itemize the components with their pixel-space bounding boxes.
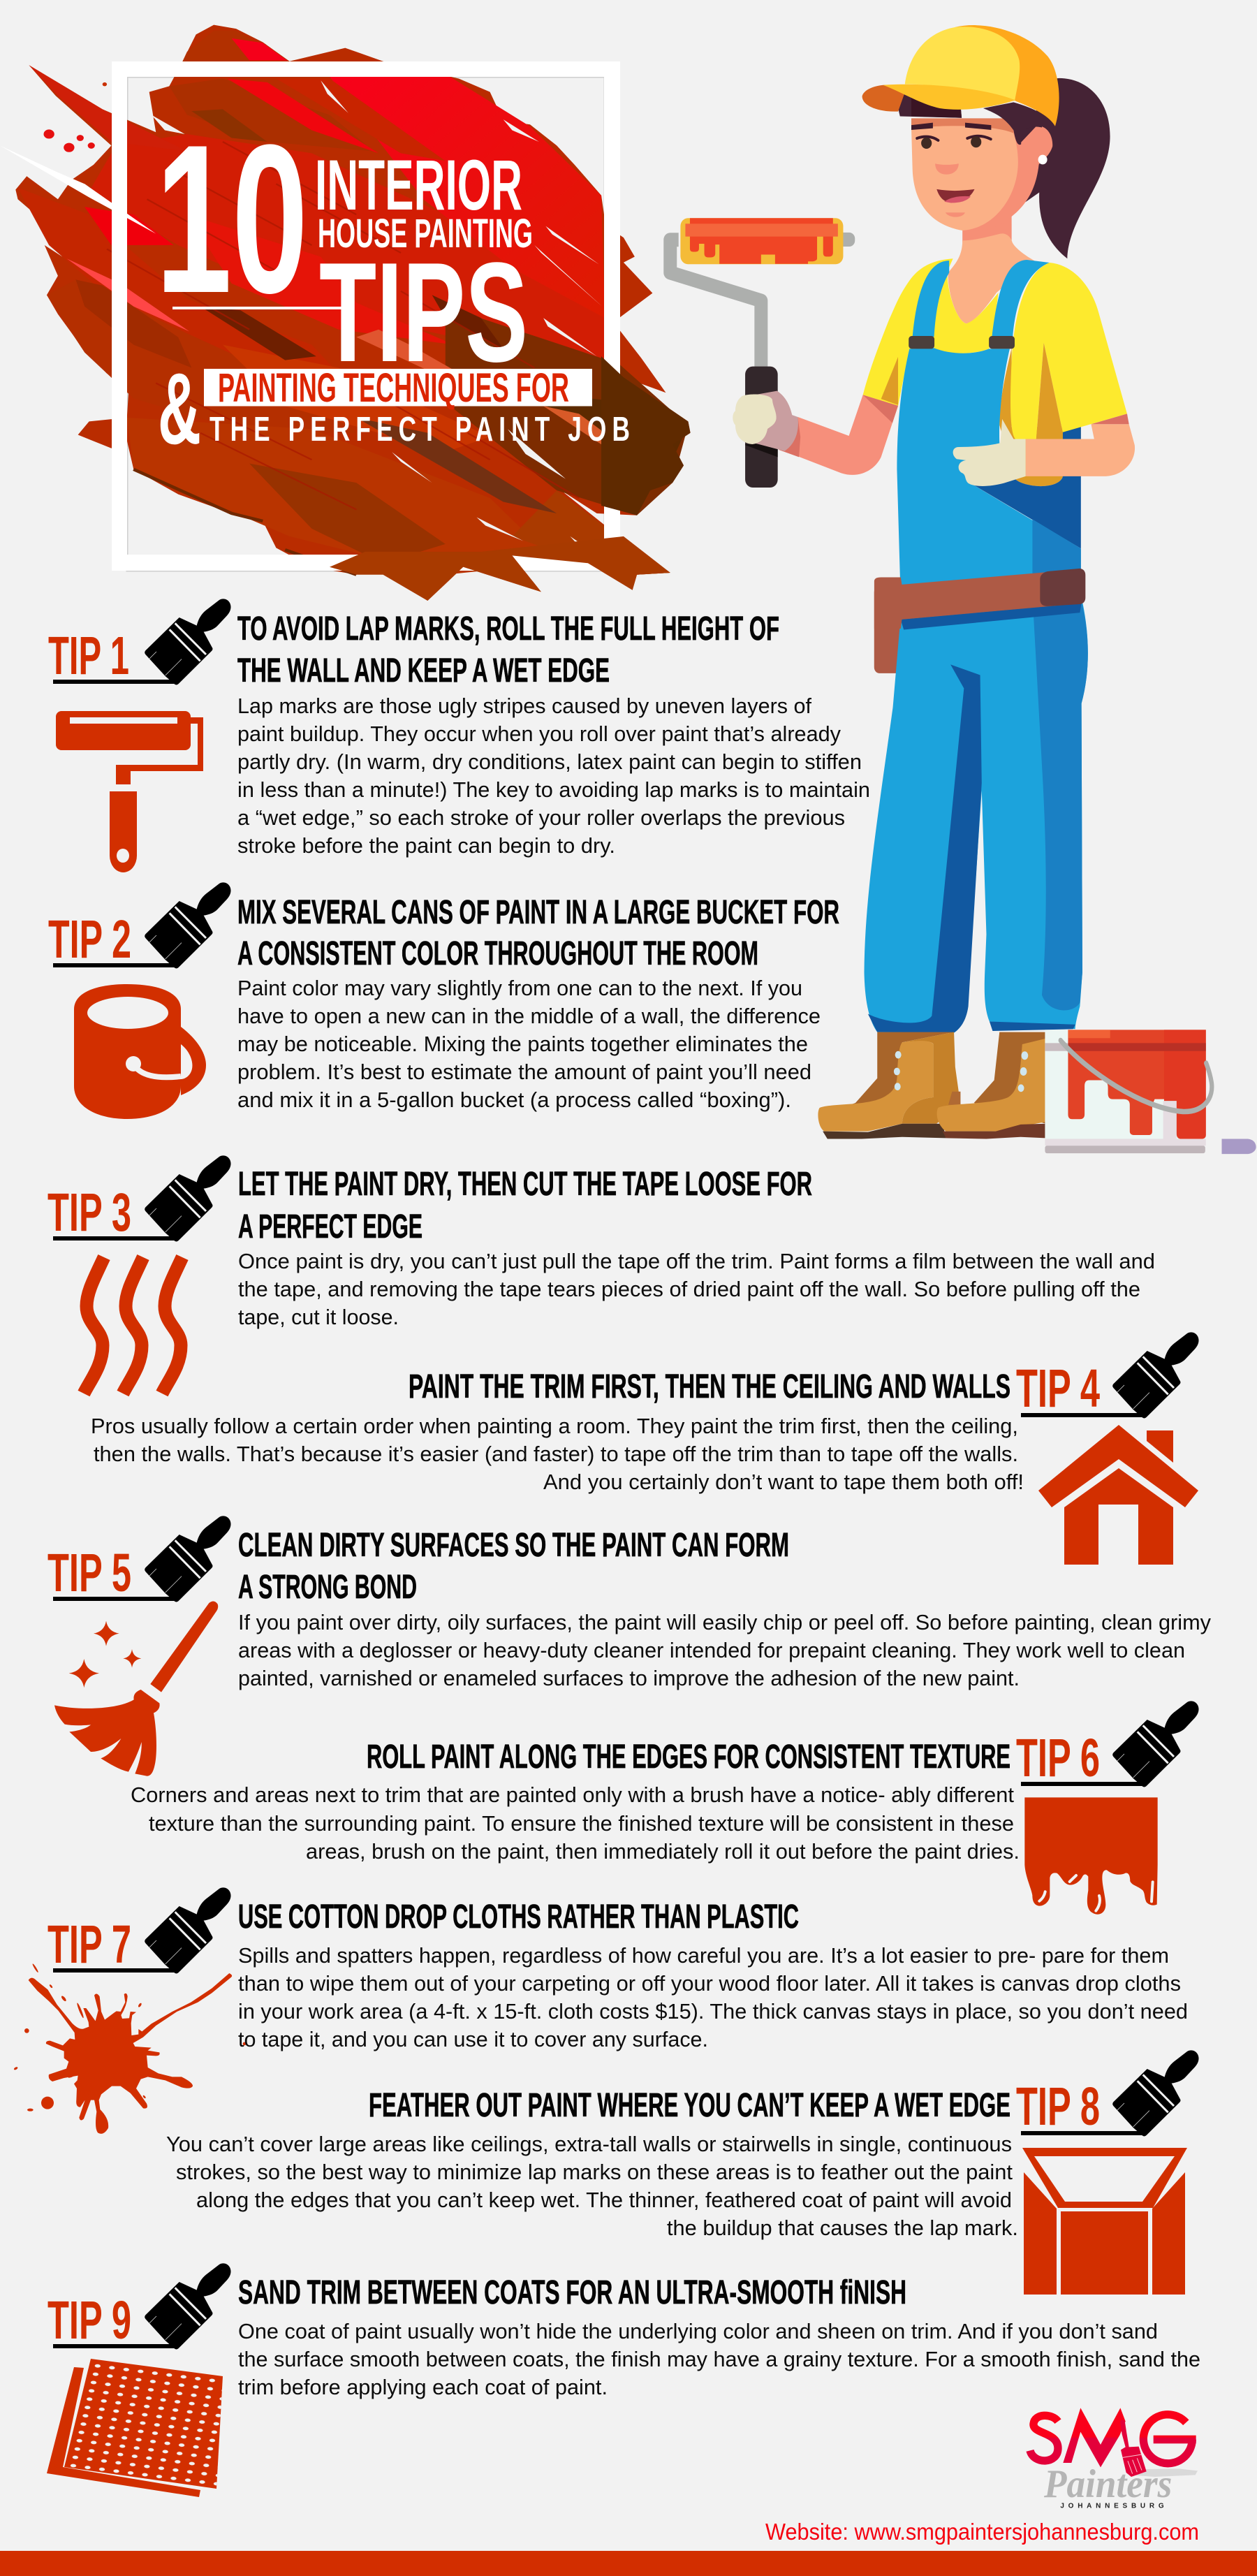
- paint overlapping the frame: [330, 356, 691, 601]
- tip 2 body text: and mix it in a 5-gallon bucket (a process called “boxing”).: [237, 1088, 791, 1112]
- tip 6 label: TIP 6: [1016, 1728, 1100, 1788]
- tip 5 label: [47, 1516, 231, 1603]
- tip 8 body text: along the edges that you can’t keep wet. The thinner, feathered coat of paint will avoid: [196, 2188, 1012, 2212]
- tip 7: [13, 1887, 1188, 2134]
- tip 4 body text: Pros usually follow a certain order when painting a room. They paint the trim first, then the ceiling,: [91, 1414, 1018, 1438]
- tip 1 body text: [237, 694, 870, 858]
- white frame: [112, 61, 620, 571]
- icon: sandpaper sheet: [47, 2359, 223, 2497]
- tip 7 body text: to tape it, and you can use it to cover any surface.: [238, 2027, 708, 2051]
- tip 6 body text: [131, 1783, 1020, 1864]
- tip 8 body text: the buildup that causes the lap mark.: [667, 2216, 1018, 2240]
- tip 7 body text: [238, 1943, 1188, 2051]
- tip 7 heading: USE COTTON DROP CLOTHS RATHER THAN PLASTIC: [238, 1898, 799, 1935]
- icon: paint roller: [56, 711, 203, 872]
- tip 7 label: TIP 7: [47, 1915, 131, 1975]
- icon: house: [1038, 1425, 1198, 1565]
- icon: paint bucket: [74, 984, 206, 1119]
- icon: broom with sparkles: [54, 1602, 218, 1776]
- worker: legs and boots: [818, 586, 1088, 1139]
- tip 8: [166, 2050, 1199, 2295]
- tip 1 body text: a “wet edge,” so each stroke of your roller overlaps the previous: [237, 805, 845, 830]
- tip 4 body text: And you certainly don’t want to tape them both off!: [543, 1470, 1024, 1494]
- logo: SMG Painters Johannesburg: Painters: [1043, 2463, 1172, 2506]
- tip 1 body text: Lap marks are those ugly stripes caused by uneven layers of: [237, 694, 811, 718]
- worker figure: [670, 25, 1256, 1154]
- tip 1 label: TIP 1: [48, 626, 129, 686]
- tip 2: [48, 882, 839, 1119]
- tip 9 body text: trim before applying each coat of paint.: [238, 2375, 608, 2399]
- rule under 10: [172, 307, 343, 309]
- tip 1 heading: [237, 610, 779, 689]
- tip 1 label: [48, 599, 231, 686]
- tip 5 body text: [238, 1610, 1211, 1690]
- subtitle: perfect paint job: THE PERFECT PAINT JOB: [210, 410, 630, 448]
- tip 7 label: [47, 1887, 231, 1975]
- tip 8 body text: [166, 2132, 1018, 2240]
- tip 9 heading: SAND TRIM BETWEEN COATS FOR AN ULTRA-SMOOTH ﬁNISH: [238, 2274, 906, 2311]
- tip 1 heading: TO AVOID LAP MARKS, ROLL THE FULL HEIGHT OF: [237, 610, 779, 647]
- title: interior: INTERIOR: [315, 145, 522, 225]
- tip 9 body text: [238, 2319, 1200, 2399]
- icon: masked wall panel: [1022, 2148, 1187, 2295]
- tip 6 body text: areas, brush on the paint, then immediately roll it out before the paint dries.: [306, 1839, 1020, 1864]
- tip 1 heading: THE WALL AND KEEP A WET EDGE: [237, 652, 610, 689]
- tip 3 body text: [238, 1249, 1155, 1329]
- tip 9 label: TIP 9: [47, 2290, 131, 2350]
- worker: upper body, head and roller: [670, 25, 1135, 629]
- tip 5 label: TIP 5: [47, 1543, 131, 1603]
- website link: Website: www.smgpaintersjohannesburg.com: [765, 2519, 1199, 2545]
- tip 5 body text: painted, varnished or enameled surfaces to improve the adhesion of the new paint.: [238, 1666, 1020, 1690]
- tip 4 label: [1016, 1332, 1199, 1419]
- tip 3 body text: Once paint is dry, you can’t just pull the tape off the trim. Paint forms a film between the wall and: [238, 1249, 1155, 1273]
- tip 1 body text: paint buildup. They occur when you roll over paint that’s already: [237, 722, 841, 746]
- tip 1 body text: in less than a minute!) The key to avoiding lap marks is to maintain: [237, 777, 870, 802]
- logo: SMG Painters Johannesburg: [1030, 2408, 1198, 2510]
- tip 5 body text: If you paint over dirty, oily surfaces, the paint will easily chip or peel off. So before painting, clean grimy: [238, 1610, 1211, 1634]
- tip 8 label: TIP 8: [1016, 2077, 1100, 2137]
- tip 9 label: [47, 2263, 231, 2350]
- tip 2 body text: problem. It’s best to estimate the amount of paint you’ll need: [237, 1060, 811, 1084]
- frame shadow line: [127, 77, 605, 571]
- tip 9 body text: One coat of paint usually won’t hide the underlying color and sheen on trim. And if you don’t sand: [238, 2319, 1158, 2343]
- tip 2 heading: A CONSISTENT COLOR THROUGHOUT THE ROOM: [237, 935, 758, 972]
- tip 3 heading: [238, 1166, 812, 1245]
- tip 3 body text: the tape, and removing the tape tears pieces of dried paint off the wall. So before pulling off the: [238, 1277, 1140, 1301]
- tip 7 body text: in your work area (a 4-ft. x 15-ft. cloth costs $15). The thick canvas stays in place, so you don’t need: [238, 1999, 1188, 2024]
- tip 6 label: [1016, 1701, 1199, 1788]
- tip 4: [91, 1332, 1199, 1565]
- tip 6: [131, 1701, 1199, 1915]
- tip 1 body text: partly dry. (In warm, dry conditions, latex paint can begin to stiffen: [237, 749, 862, 774]
- tip 1: [48, 599, 870, 872]
- icon: wavy heat lines: [84, 1257, 182, 1393]
- tip 4 body text: then the walls. That’s because it’s easier (and faster) to tape off the trim than to tape off the walls.: [94, 1442, 1018, 1466]
- title: ampersand: &: [158, 352, 201, 465]
- tip 6 body text: Corners and areas next to trim that are painted only with a brush have a notice- ably different: [131, 1783, 1014, 1807]
- tip 3 body text: tape, cut it loose.: [238, 1305, 399, 1329]
- tip 4 body text: [91, 1414, 1024, 1494]
- tip 2 heading: [237, 894, 839, 972]
- tip 8 body text: strokes, so the best way to minimize lap marks on these areas is to feather out the paint: [176, 2160, 1013, 2184]
- tip 2 body text: [237, 976, 821, 1112]
- tip 3 label: [47, 1155, 231, 1243]
- tip 7 body text: Spills and spatters happen, regardless of how careful you are. It’s a lot easier to pre- pare for them: [238, 1943, 1169, 1968]
- tip 2 body text: have to open a new can in the middle of a wall, the difference: [237, 1004, 821, 1028]
- tip 5 body text: areas with a deglosser or heavy-duty cleaner intended for prepaint cleaning. They work well to clean: [238, 1638, 1185, 1662]
- paint can beside the worker: [1045, 1030, 1256, 1154]
- tip 2 label: TIP 2: [48, 909, 131, 969]
- tip 7 body text: than to wipe them out of your carpeting or off your wood floor later. All it takes is canvas drop cloths: [238, 1971, 1181, 1996]
- icon: paint splat: [13, 1963, 246, 2134]
- tip 2 body text: may be noticeable. Mixing the paints together eliminates the: [237, 1032, 808, 1056]
- tip 5 heading: A STRONG BOND: [238, 1569, 417, 1606]
- tip 5 heading: [238, 1527, 789, 1606]
- tip 4 label: TIP 4: [1016, 1359, 1100, 1419]
- tip 3 heading: LET THE PAINT DRY, THEN CUT THE TAPE LOOSE FOR: [238, 1166, 812, 1203]
- tip 9: [47, 2263, 1200, 2497]
- title: tips: TIPS: [319, 233, 528, 392]
- hero: paint splash and title: [0, 25, 691, 601]
- icon: dripping paint: [1024, 1797, 1158, 1915]
- tip 6 body text: texture than the surrounding paint. To ensure the finished texture will be consistent in these: [149, 1811, 1014, 1836]
- title: house painting: HOUSE PAINTING: [318, 211, 533, 256]
- tip 2 label: [48, 882, 231, 969]
- tip 5: [47, 1516, 1211, 1776]
- subtitle box: PAINTING TECHNIQUES FOR: [218, 365, 569, 411]
- bottom bar: [0, 2551, 1257, 2576]
- tip 2 heading: MIX SEVERAL CANS OF PAINT IN A LARGE BUCKET FOR: [237, 894, 839, 931]
- tip 9 body text: the surface smooth between coats, the finish may have a grainy texture. For a smooth finish, sand the: [238, 2347, 1200, 2371]
- tip 5 heading: CLEAN DIRTY SURFACES SO THE PAINT CAN FORM: [238, 1527, 789, 1564]
- tip 8 label: [1016, 2050, 1199, 2137]
- logo: SMG Painters Johannesburg: JOHANNESBURG: [1060, 2503, 1164, 2510]
- subtitle box: [204, 365, 592, 411]
- title: 10: 10: [156, 101, 308, 337]
- tip 3: [47, 1155, 1155, 1393]
- tip 1 body text: stroke before the paint can begin to dry.: [237, 833, 615, 858]
- tip 8 body text: You can’t cover large areas like ceilings, extra-tall walls or stairwells in single, continuous: [166, 2132, 1012, 2156]
- tip 3 heading: A PERFECT EDGE: [238, 1208, 422, 1245]
- tip 2 body text: Paint color may vary slightly from one can to the next. If you: [237, 976, 802, 1000]
- paint splash: [0, 25, 691, 601]
- tip 3 label: TIP 3: [47, 1183, 131, 1243]
